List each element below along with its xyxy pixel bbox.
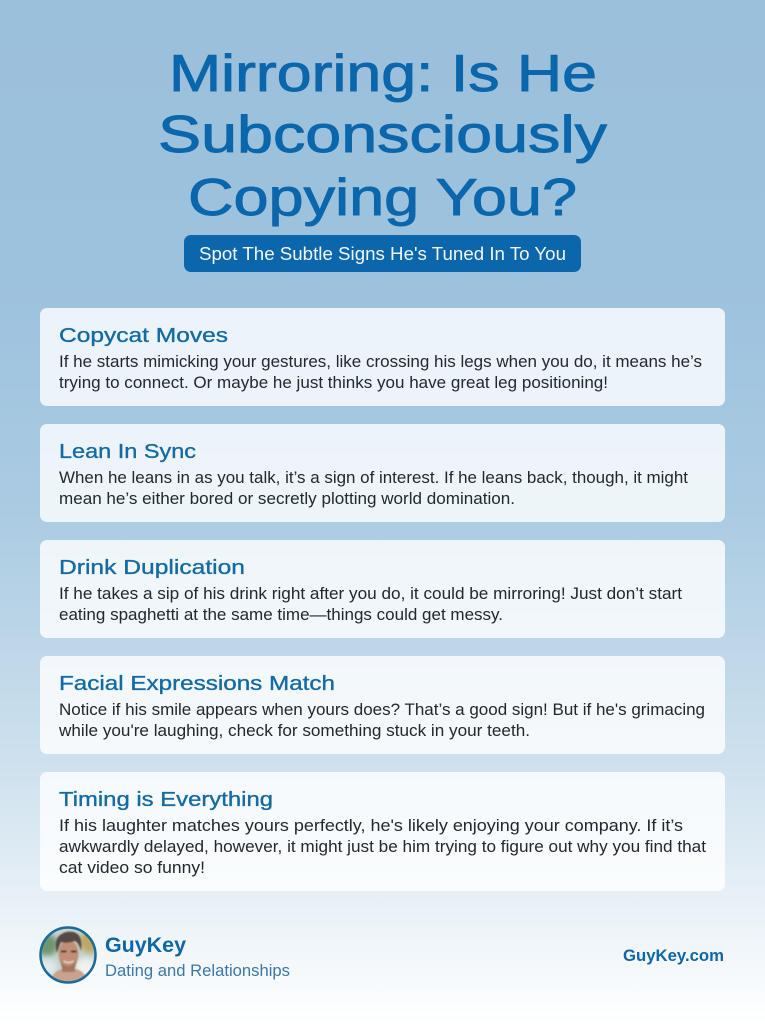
panel: drink duplication <box>40 540 725 638</box>
panel: lean in sync: Lean In Sync <box>59 440 196 463</box>
panel: copycat moves <box>40 308 725 406</box>
panel: facial expressions match: while you're laughing, check for something stuck in your teeth. <box>58 721 530 740</box>
panel: timing is everything: awkwardly delayed, however, it might just be him trying to figure out why you find that <box>59 837 706 856</box>
panel: facial expressions match: Facial Expressions Match <box>59 672 335 695</box>
title: Subconsciously <box>158 106 607 164</box>
panel: copycat moves: Copycat Moves <box>59 324 228 347</box>
subtitle badge: Spot The Subtle Signs He's Tuned In To You <box>199 244 566 264</box>
panel: drink duplication: Drink Duplication <box>59 556 245 579</box>
panel: timing is everything: If his laughter matches yours perfectly, he's likely enjoying your company. If it’s <box>59 816 683 835</box>
title <box>158 45 607 227</box>
panel: lean in sync: mean he’s either bored or secretly plotting world domination. <box>59 489 515 508</box>
title: Mirroring: Is He <box>169 45 597 103</box>
panel: lean in sync <box>40 424 725 522</box>
subtitle badge <box>184 235 581 272</box>
panel: timing is everything <box>40 772 725 891</box>
panel: timing is everything: cat video so funny! <box>59 858 205 877</box>
brand tagline: Dating and Relationships <box>105 962 290 980</box>
panel: copycat moves: trying to connect. Or maybe he just thinks you have great leg positioning! <box>59 373 608 392</box>
panel: copycat moves: If he starts mimicking your gestures, like crossing his legs when you do, it means he’s <box>59 352 702 371</box>
panel: lean in sync: When he leans in as you talk, it’s a sign of interest. If he leans back, though, it might <box>59 468 688 487</box>
panel: drink duplication: eating spaghetti at the same time—things could get messy. <box>59 605 503 624</box>
panel: timing is everything: Timing is Everything <box>59 788 273 811</box>
icon: avatar portrait <box>39 926 97 984</box>
brand name: GuyKey <box>105 934 186 957</box>
panel: facial expressions match <box>40 656 725 754</box>
panel: drink duplication: If he takes a sip of his drink right after you do, it could be mirroring! Just don’t start <box>59 584 682 603</box>
title: Copying You? <box>188 169 577 227</box>
panel: facial expressions match: Notice if his smile appears when yours does? That’s a good sign! But if he's grimacing <box>59 700 705 719</box>
website link: GuyKey.com <box>623 947 724 965</box>
